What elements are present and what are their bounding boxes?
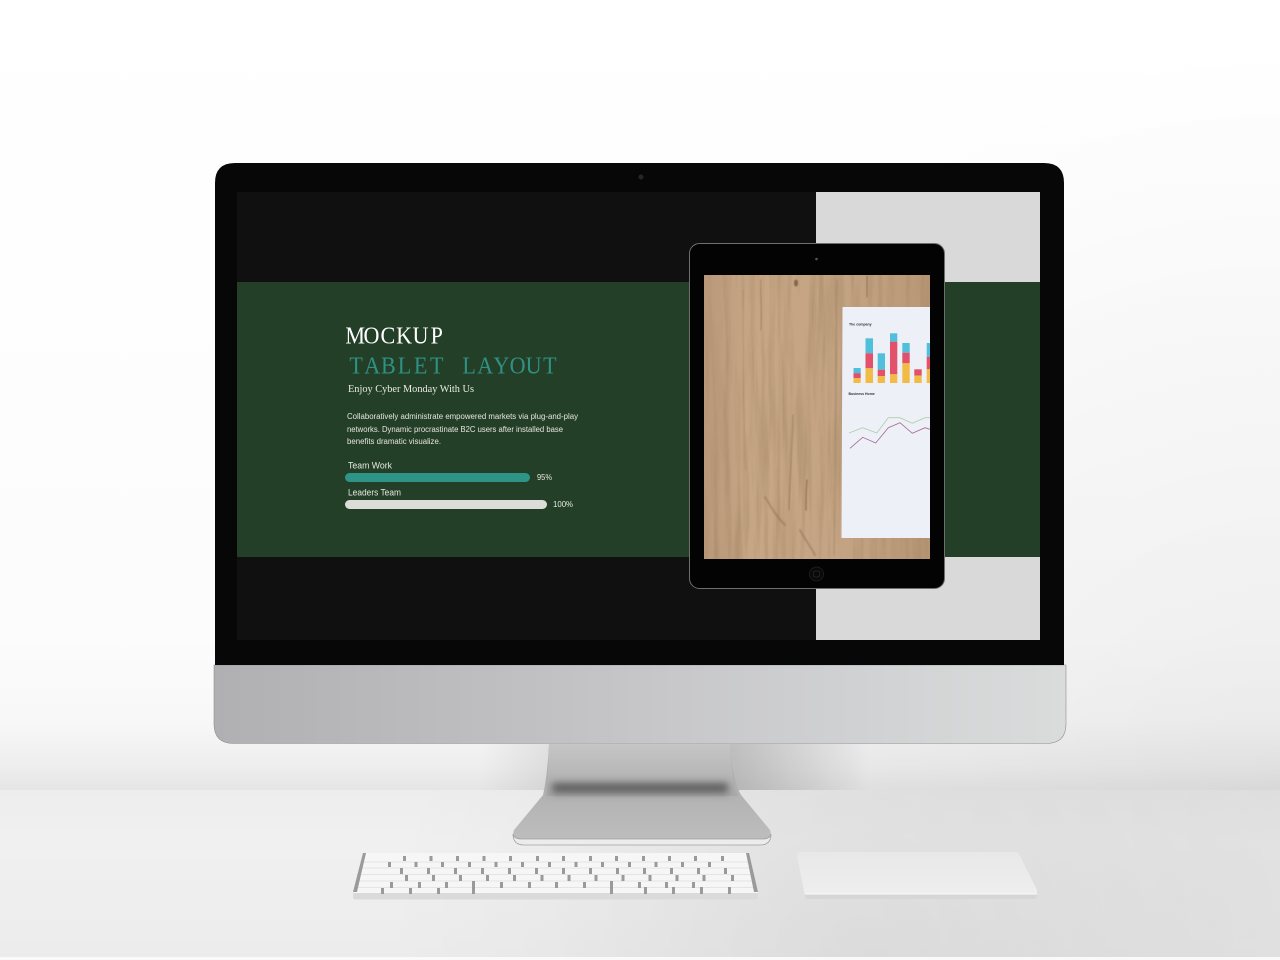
monitor stand bbox=[513, 744, 771, 845]
tablet screen photo bbox=[704, 275, 932, 559]
progress: team work: Team Work bbox=[348, 460, 392, 470]
title: tablet layout: TABLET LAYOUT bbox=[349, 352, 557, 379]
body paragraph: Collaboratively administrate empowered markets via plug-and-play bbox=[347, 412, 578, 421]
progress: team work: 95% bbox=[537, 473, 552, 482]
subtitle: Enjoy Cyber Monday With Us bbox=[348, 383, 474, 395]
tablet bbox=[690, 244, 944, 588]
progress: leaders team: 100% bbox=[553, 500, 573, 509]
home button bbox=[810, 567, 824, 581]
stacked bar chart bbox=[854, 333, 932, 383]
light grey panel bbox=[816, 192, 1040, 640]
webcam bbox=[638, 174, 644, 180]
title: mockup: MOCKUP bbox=[345, 322, 443, 349]
monitor bezel bbox=[215, 163, 1064, 665]
wood surface bbox=[704, 275, 930, 559]
chart title: The company bbox=[849, 322, 872, 326]
green band bbox=[237, 282, 1040, 557]
line chart bbox=[849, 418, 932, 448]
paper sheet bbox=[842, 307, 932, 538]
progress: leaders team: Leaders Team bbox=[348, 488, 401, 498]
line chart title: Business Home bbox=[848, 392, 875, 396]
screen dark background bbox=[237, 192, 1040, 640]
monitor body bbox=[214, 163, 1066, 744]
monitor chin bbox=[214, 665, 1066, 744]
slide screen bbox=[237, 192, 1040, 640]
tablet camera bbox=[815, 258, 818, 260]
keyboard bbox=[353, 853, 758, 900]
body paragraph bbox=[347, 412, 578, 446]
progress: team work bbox=[345, 460, 552, 482]
tablet body bbox=[690, 244, 944, 588]
title block bbox=[345, 322, 557, 395]
key gaps bbox=[381, 856, 734, 894]
body paragraph: benefits dramatic visualize. bbox=[347, 437, 441, 446]
trackpad bbox=[797, 852, 1037, 899]
keyboard body bbox=[353, 853, 758, 899]
progress: leaders team bbox=[345, 488, 573, 509]
body paragraph: networks. Dynamic procrastinate B2C users after installed base bbox=[347, 425, 564, 434]
